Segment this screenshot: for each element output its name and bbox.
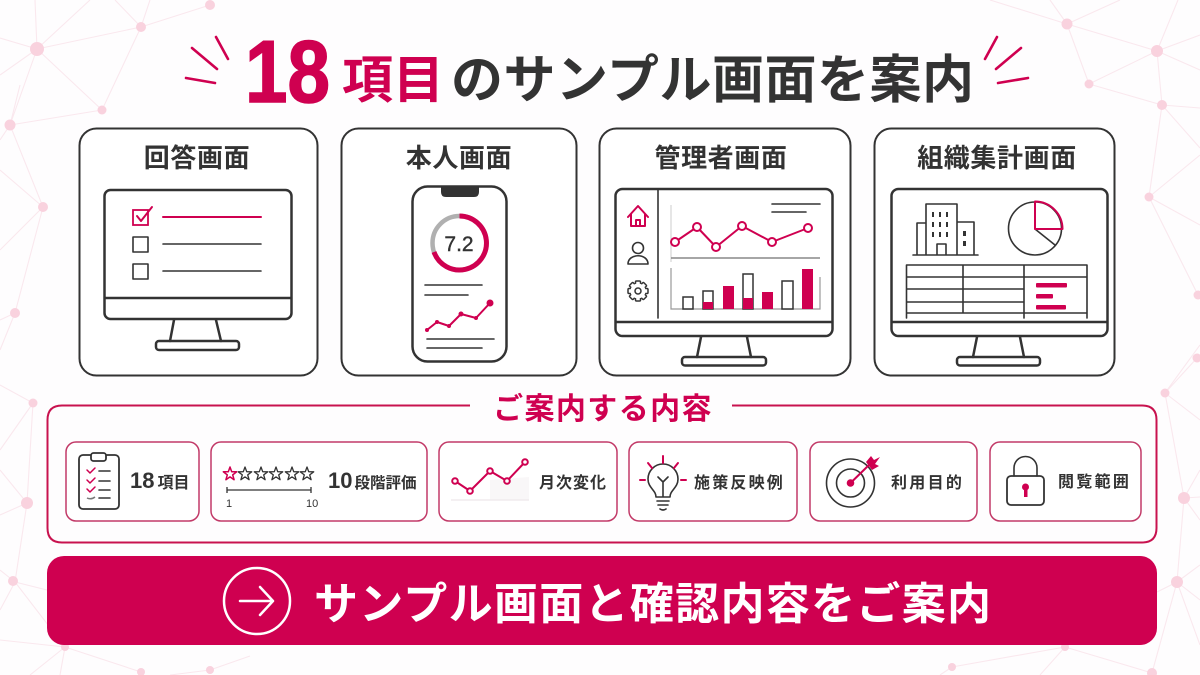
card: 10段階評価 bbox=[211, 442, 427, 521]
icon: smartphone bbox=[412, 186, 506, 362]
card: 利用目的 bbox=[810, 442, 977, 521]
icon: clipboard bbox=[79, 453, 119, 509]
heading: 本人画面 bbox=[406, 138, 512, 175]
table bbox=[906, 265, 1087, 318]
label: 利用目的 bbox=[891, 469, 964, 493]
icon: trend line bbox=[451, 459, 529, 500]
title word 項目: 項目 bbox=[342, 39, 444, 113]
line chart bbox=[671, 204, 820, 262]
sidebar icon: home bbox=[628, 206, 648, 226]
icon: star rating scale: 10 bbox=[306, 498, 318, 510]
icon: desktop monitor with checklist bbox=[104, 190, 292, 350]
bar chart bbox=[671, 268, 820, 309]
heading: 管理者画面 bbox=[654, 138, 788, 175]
section heading: ご案内する内容 bbox=[493, 384, 713, 428]
icon: star rating scale bbox=[223, 467, 318, 510]
label: 施策反映例 bbox=[694, 469, 785, 493]
panel: 管理者画面 bbox=[600, 128, 850, 376]
banner text: サンプル画面と確認内容をご案内 bbox=[314, 568, 991, 632]
card: 閲覧範囲 bbox=[990, 442, 1141, 521]
icon: target with arrow bbox=[826, 456, 880, 507]
icon: arrow in circle bbox=[224, 568, 290, 634]
title burst marks left bbox=[186, 37, 228, 83]
card: 施策反映例 bbox=[629, 442, 797, 521]
pie chart bbox=[1008, 202, 1062, 255]
call to action banner bbox=[47, 556, 1157, 645]
icon: light bulb bbox=[640, 456, 686, 510]
title bbox=[245, 22, 974, 121]
icon: organization monitor bbox=[892, 189, 1108, 366]
panel: ご案内する内容 bbox=[48, 384, 1156, 542]
title remainder: のサンプル画面を案内 bbox=[451, 38, 974, 113]
score: 7.2 bbox=[444, 233, 474, 256]
title number 18: 18 bbox=[245, 22, 330, 121]
heading: 回答画面 bbox=[144, 138, 250, 175]
label: 10段階評価 bbox=[328, 468, 416, 493]
card: 18項目 bbox=[66, 442, 199, 521]
label: 月次変化 bbox=[539, 469, 607, 493]
icon: star rating scale: 1 bbox=[226, 498, 232, 510]
sidebar icon: gear bbox=[628, 281, 648, 301]
panel: 本人画面 bbox=[342, 128, 576, 376]
icon: admin dashboard monitor bbox=[616, 189, 832, 366]
label: 18項目 bbox=[130, 468, 190, 493]
icon: padlock bbox=[1007, 456, 1044, 505]
panel: 回答画面 bbox=[80, 128, 318, 376]
heading: 組織集計画面 bbox=[917, 138, 1077, 175]
title burst marks right bbox=[985, 37, 1028, 83]
card: 月次変化 bbox=[439, 442, 617, 521]
panel: 組織集計画面 bbox=[874, 128, 1114, 376]
label: 閲覧範囲 bbox=[1058, 468, 1131, 492]
building bbox=[913, 204, 978, 255]
sidebar icon: user bbox=[628, 242, 648, 264]
